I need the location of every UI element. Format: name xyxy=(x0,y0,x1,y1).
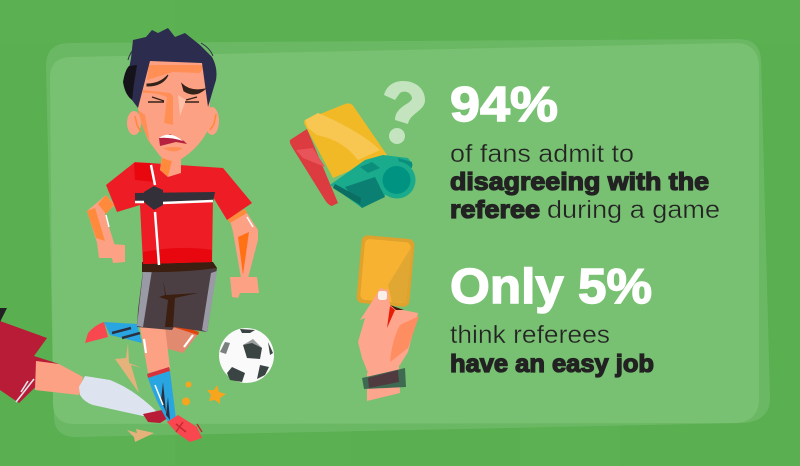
right arm xyxy=(227,209,259,298)
text: fans disagreeing: during a game xyxy=(547,196,720,224)
text: easy job: think referees xyxy=(450,321,610,349)
text: easy job xyxy=(450,321,654,378)
icon: whistle xyxy=(330,155,416,208)
stat: only 5%: Only 5% xyxy=(450,260,652,314)
icon: yellow card xyxy=(304,103,387,178)
panel: back card xyxy=(46,39,770,437)
icon: question mark xyxy=(384,81,425,144)
icon: orange star and dots xyxy=(182,382,226,406)
head xyxy=(123,28,219,161)
text: easy job: have an easy job xyxy=(450,350,654,378)
text: fans disagreeing: disagreeing with the xyxy=(450,168,709,196)
stat: 94%: 94% xyxy=(450,78,558,132)
icon: impact flashes xyxy=(115,343,154,442)
back leg and boot xyxy=(85,322,199,353)
text: fans disagreeing xyxy=(450,140,720,224)
illustration: referee xyxy=(85,28,259,442)
left arm xyxy=(87,195,125,263)
neck xyxy=(160,155,181,177)
illustration: tackling player leg xyxy=(0,308,168,423)
front leg and boot xyxy=(140,327,202,442)
icon: soccer ball xyxy=(219,328,274,383)
text: fans disagreeing: of fans admit to xyxy=(450,140,634,168)
icon: hand holding yellow card xyxy=(356,235,419,401)
icon: red card xyxy=(290,129,338,206)
panel: front card xyxy=(50,43,759,424)
jersey xyxy=(106,162,252,265)
shorts xyxy=(137,262,217,332)
text: fans disagreeing: referee xyxy=(450,196,540,224)
